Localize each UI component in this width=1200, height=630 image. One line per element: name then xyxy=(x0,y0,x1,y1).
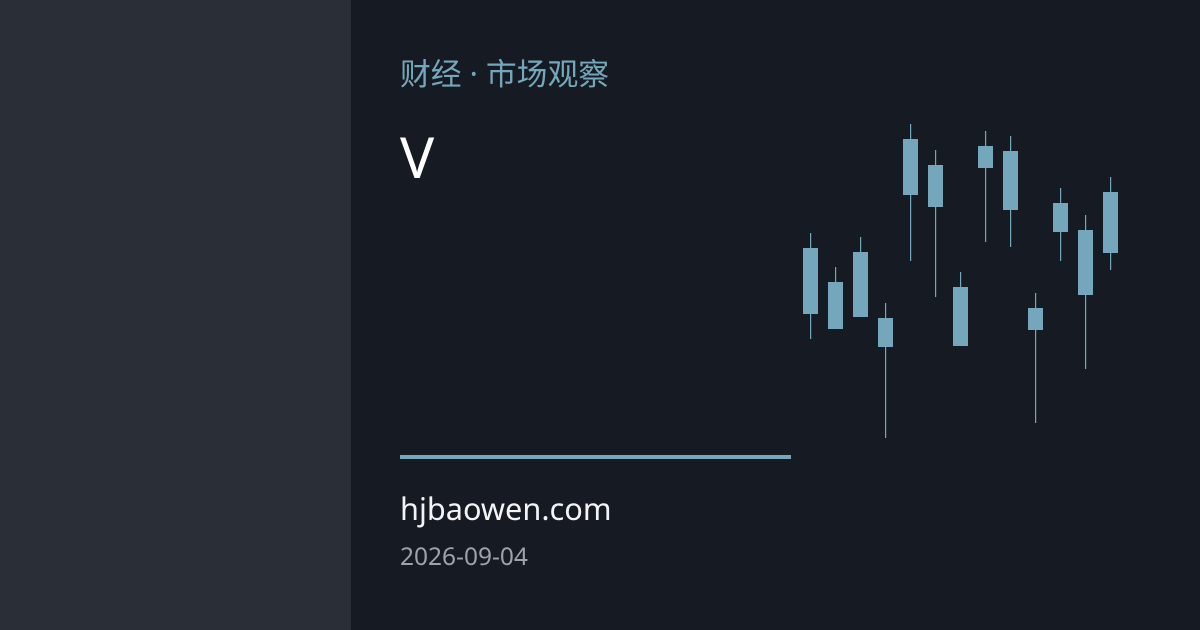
site domain: hjbaowen.com xyxy=(400,487,612,529)
title: V xyxy=(400,117,434,195)
divider rule xyxy=(400,455,791,459)
left sidebar panel xyxy=(0,0,351,630)
category heading: 财经 · 市场观察 xyxy=(400,53,609,95)
date: 2026-09-04 xyxy=(400,540,528,573)
